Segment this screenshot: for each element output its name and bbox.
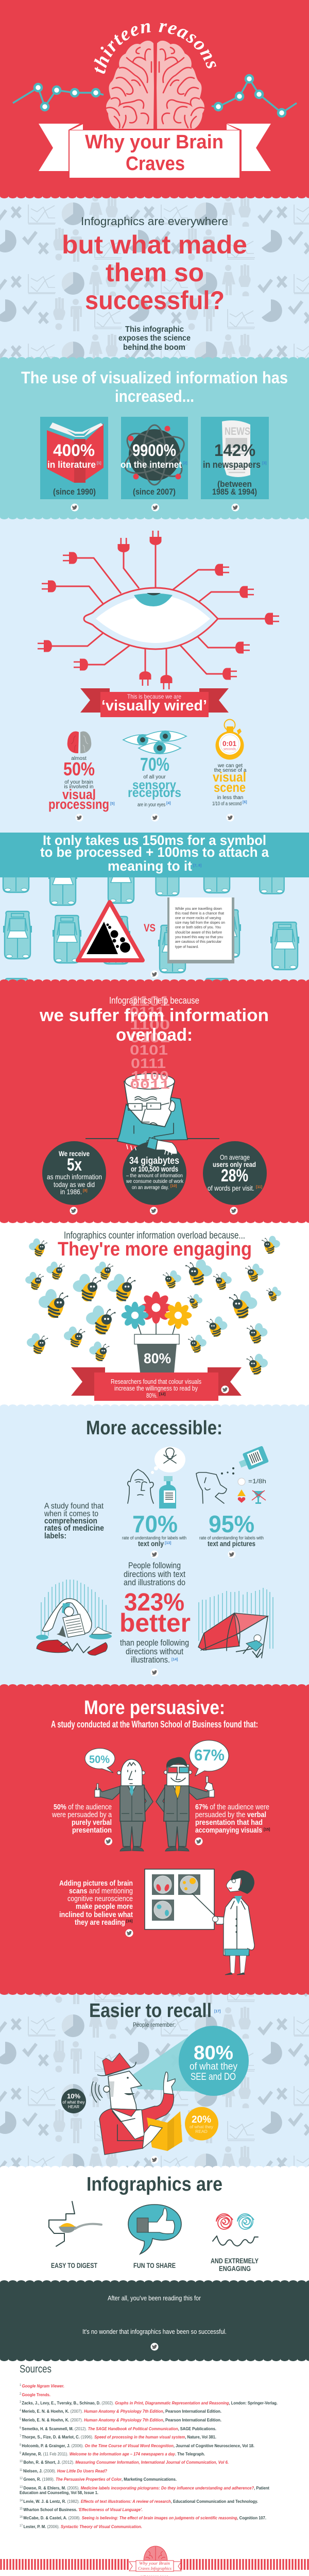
sources list: Google Ngram Viewer. [22, 2383, 64, 2388]
stat bubble: 10%: 10% [67, 2092, 80, 2100]
heading: more accessible: More accessible: [86, 1417, 222, 1439]
stat: 95% text and pictures [199, 1511, 264, 1558]
binary digits stream: 0101 [130, 1042, 168, 1058]
icon: extremely engaging: ENGAGING [219, 2264, 251, 2273]
stat bubble: 20% [185, 2107, 218, 2140]
sources list: McCabe, D. & Castel, A. [23, 2515, 68, 2520]
text: brain scans persuade: scans and mentioning [69, 1887, 133, 1895]
stat: 50% visual processing: 50% [63, 758, 95, 779]
stat circle: 5x: as much information [47, 1173, 102, 1181]
stat: 70% text only [122, 1511, 186, 1558]
stat: visual scene: scene [214, 779, 246, 795]
icon: stopwatch: 0:01 [222, 739, 236, 748]
text: medicine label study: comprehension [44, 1517, 97, 1526]
icon: book [47, 422, 104, 483]
stat circle: 28%: of words per visit. [208, 1184, 254, 1192]
stat: 70% text only: 70% [132, 1511, 178, 1537]
sources list: Alleyne, R. [22, 2451, 43, 2456]
speech bubble: 67%: 67% [194, 1746, 225, 1764]
sources list: (2005). Medicine labels incorporating pictograms: Do they influence understanding and adherence?, Patient [67, 2485, 275, 2490]
sources list: 10 [20, 2460, 23, 2463]
sources list: Dowse, R. & Ehlers, M. [23, 2485, 67, 2490]
red overload section background [0, 981, 309, 1221]
panel: literature: 400% [53, 441, 95, 460]
stat: visual scene: the sense of a [214, 768, 247, 773]
intro text: them so [106, 258, 204, 287]
heading: easier to recall: [17] [214, 2010, 220, 2013]
icon: fun to share: FUN TO SHARE [133, 2261, 176, 2269]
heading: easier to recall: Easier to recall [89, 2000, 212, 2022]
banner: 150ms [0, 833, 309, 877]
icon: easy to digest: EASY TO DIGEST [51, 2261, 97, 2269]
sources list: 2 [20, 2393, 22, 2396]
text: brain scans persuade: make people more [76, 1902, 133, 1911]
stat: visual scene [212, 719, 247, 807]
illustration: flower pot 80%: 80% [144, 1350, 171, 1366]
sources list: Thorpe, S., Fize, D. & Marlot, C. [22, 2434, 81, 2439]
stat: 323% better: than people following [120, 1638, 189, 1648]
intro text: but what made [62, 230, 247, 259]
text: 67% with visuals: [15] [264, 1828, 270, 1832]
text sign card: this road there is a chance that [175, 911, 225, 916]
heading: information overload: we suffer from information [39, 1006, 269, 1025]
stat: 70% text only: text only [138, 1539, 164, 1548]
panel: newspapers: (between [217, 479, 252, 489]
stat circle: 5x [42, 1141, 106, 1205]
banner: 150ms: It only takes us 150ms for a symbol [43, 833, 266, 848]
man's hand over circle [127, 1138, 177, 1155]
stat circle: 34 gigabytes: we consume outside of work [126, 1179, 184, 1184]
panel: newspapers: [3] [262, 462, 267, 465]
illustration: verbal presenter [85, 1748, 153, 1851]
illustration: wired eye with plugs [38, 531, 279, 689]
text sign card: one or both sides of you. You [175, 925, 221, 929]
intro text: behind the boom [123, 343, 185, 352]
sources list: Lester, P. M. [23, 2524, 47, 2529]
icon: fun to share [128, 2205, 181, 2269]
stat circle: 28%: On average [220, 1153, 250, 1161]
stat: 50% visual processing: of your brain [64, 779, 93, 785]
sources list: (1989). The Persuasive Properties of Color, Marketing Communications. [42, 2477, 183, 2482]
stat bubble: 80%: of what they [190, 2061, 237, 2072]
heading: more engaging: They're more engaging [58, 1239, 252, 1260]
text: brain scans persuade: Adding pictures of brain [59, 1879, 133, 1888]
bees swarm [25, 1236, 281, 1376]
closing panel text: It's no wonder that infographics have been so successful. [82, 2328, 227, 2335]
sources list: (11 Feb 2011). Welcome to the information age – 174 newspapers a day. The Telegraph. [43, 2451, 209, 2456]
icon: newspaper [222, 420, 250, 477]
intro text: successful? [85, 286, 225, 315]
share icons row 1 [71, 504, 239, 511]
sources list: 12 [20, 2477, 23, 2480]
stat circle: 28%: users only read [213, 1160, 256, 1168]
ribbon: colour visuals: [12] [159, 1393, 165, 1396]
stat: 70% text only: rate of understanding for labels with [122, 1535, 186, 1541]
sources list: Bohn, R. & Short, J. [23, 2460, 62, 2465]
text: 50% verbal presentation: purely verbal [72, 1818, 112, 1827]
panel: newspapers: 1985 & 1994) [212, 487, 257, 497]
stat: 323% better: 323% [124, 1589, 184, 1616]
stat: 50% visual processing: [5] [110, 802, 115, 806]
stat circle: 34 gigabytes: – the amount of information [126, 1173, 183, 1179]
text sign card: one or more rocks of varying [175, 916, 221, 920]
icon: stopwatch [215, 719, 244, 759]
stat circle: 34 gigabytes: [10] [170, 1184, 177, 1188]
stat circle: 28% [203, 1141, 267, 1205]
background cars [2, 845, 299, 1027]
ribbon: visually wired [80, 688, 229, 717]
stat circle: 28%: [11] [256, 1185, 262, 1189]
stat: 323% better: better [119, 1608, 191, 1637]
stat: 70% sensory receptors: receptors [128, 786, 181, 800]
text: 67% with visuals [195, 1803, 270, 1845]
icon: globe [120, 425, 189, 485]
text sign card: should be aware of this before [175, 930, 222, 935]
panel: newspapers: 142% [214, 441, 255, 460]
illustration: overloaded man: 1100 [131, 1070, 169, 1085]
sources list: 13 [20, 2486, 23, 2489]
icon: brain [106, 41, 204, 129]
stat: visual scene: 1/10 of a second [212, 801, 242, 807]
sources list: 15 [20, 2507, 23, 2511]
stat circle: 5x: We receive [59, 1149, 90, 1158]
text sign card: While you are travelling down [175, 906, 222, 911]
text sign card: type of hazard. [175, 944, 199, 949]
icon: extremely engaging [211, 2214, 259, 2273]
sources heading: Sources [20, 2363, 52, 2375]
banner: 150ms: [7, 8] [193, 864, 201, 868]
text: brain scans persuade: inclined to believe what [59, 1910, 133, 1919]
stat bubble: 80% [179, 2026, 249, 2096]
sources list: Merieb, E. N. & Hoehn, K. [22, 2409, 71, 2414]
label: VS: VS [144, 922, 156, 934]
text: medicine label study: rates of medicine [44, 1524, 104, 1533]
share icons row 2 [75, 814, 234, 821]
ribbon: colour visuals: Researchers found that colour visuals [111, 1378, 201, 1385]
text: 50% verbal presentation [52, 1803, 112, 1845]
sources list: Wharton School of Business. [23, 2507, 78, 2512]
stat: 50% visual processing [48, 732, 115, 812]
sources list: Education and Counseling, Vol 58, Issue 1. [20, 2490, 98, 2495]
binary digits stream: 0101 [130, 1030, 170, 1045]
intro text: This infographic [125, 325, 184, 334]
heading: use of visualized information: increased... [115, 387, 194, 405]
icon: stopwatch: seconds [224, 748, 236, 751]
text sign card: size may fall from the slopes on [175, 920, 225, 925]
text: 50% verbal presentation: were persuaded by a [52, 1810, 112, 1819]
stat: 50% visual processing: visual [62, 787, 96, 802]
text: brain scans persuade [59, 1879, 133, 1937]
heading: more persuasive: More persuasive: [84, 1697, 225, 1719]
stat: 323% better: directions with text [124, 1569, 185, 1579]
footer logo: small brain and ribbon: Craves Infographics [138, 2566, 171, 2571]
ribbon: colour visuals: 80%. [146, 1392, 158, 1399]
sources list: Green, R. [23, 2477, 42, 2482]
heading: information overload: overload: [116, 1025, 193, 1045]
stat circle: 34 gigabytes: on an average day. [132, 1185, 169, 1191]
panel: literature [40, 417, 108, 499]
ribbon: visually wired: This is because we are [127, 693, 181, 700]
title ribbon [39, 124, 271, 178]
stat circle: 34 gigabytes [123, 1141, 186, 1205]
line chart right [212, 75, 297, 116]
icon: half brain [67, 732, 91, 753]
illustration: confused man with medicine [128, 1447, 185, 1509]
text sign card: are cautious of this particular [175, 939, 221, 944]
stat bubble: 80%: 80% [194, 2042, 233, 2064]
sources list: 11 [20, 2469, 23, 2472]
sources list: 9 [20, 2452, 22, 2455]
sources list: (2007). Human Anatomy & Physiology 7th Edition, Pearson International Edition. [71, 2409, 228, 2414]
heading: Why your Brain Craves: Craves [126, 153, 185, 175]
text: medicine label study: when it comes to [44, 1510, 98, 1518]
speech bubble: 67% [190, 1740, 229, 1776]
stat bubble: 20%: READ [195, 2129, 208, 2134]
illustration: informed man with pictogram medicine [196, 1446, 269, 1504]
illustration: visual presenter [156, 1740, 229, 1851]
heading: information overload [39, 995, 269, 1045]
heading: use of visualized information: The use of visualized information has [21, 368, 288, 387]
stat: 323% better [119, 1561, 191, 1676]
stat: 50% visual processing: is involved in [64, 784, 94, 790]
ribbon: colour visuals: increase the willingness to read by [114, 1384, 198, 1392]
icon: falling rocks sign [78, 902, 143, 960]
footer stripes [1, 2559, 308, 2570]
panel: internet: (since 2007) [133, 487, 176, 497]
speech bubble: 50%: 50% [89, 1754, 110, 1766]
sources list: 3 [20, 2401, 22, 2404]
footer logo: small brain and ribbon [129, 2546, 181, 2571]
stat: 323% better: illustrations. [131, 1655, 170, 1665]
stat: visual scene: in less than [217, 795, 243, 801]
intro text: exposes the science [118, 334, 191, 343]
text: brain scans persuade: they are reading [75, 1918, 125, 1927]
panel: internet: on the internet [121, 460, 182, 470]
title arc: thirteen reasons: thirteen reasons [94, 23, 216, 74]
text: 67% with visuals: presentation that had [195, 1818, 263, 1827]
sources list: 14 [20, 2499, 23, 2502]
stat: visual scene: visual [213, 769, 246, 785]
text: 67% with visuals: accompanying visuals [195, 1826, 262, 1835]
sources list: Levie, W. J. & Lentz, R. [23, 2499, 67, 2504]
line chart left [13, 84, 104, 110]
intro text [62, 215, 247, 352]
heading: more engaging: Infographics counter information overload because... [64, 1230, 245, 1241]
banner: 150ms: meaning to it [108, 858, 192, 874]
sources list: 4 [20, 2409, 22, 2412]
sources list: Merieb, E. N. & Hoehn, K. [22, 2417, 71, 2422]
footer logo: small brain and ribbon: Why your Brain [139, 2561, 170, 2566]
sources list: 'Effectiveness of Visual Language'. [78, 2507, 143, 2512]
stat circle: 34 gigabytes: or 100,500 words [131, 1165, 178, 1174]
share icons row 3 [70, 1207, 238, 1215]
illustration: overloaded man [85, 1070, 219, 1150]
stat: 50% visual processing: processing [48, 796, 109, 812]
heading: use of visualized information [21, 368, 288, 405]
sources list: (2008). How Little Do Users Read? [44, 2468, 114, 2473]
stat bubble: 20%: 20% [192, 2114, 211, 2125]
heading: information overload: Infographics help because [109, 995, 199, 1006]
stat bubble: 20%: of what they [190, 2124, 214, 2129]
sources list: (2002). Graphs in Print, Diagrammatic Representation and Reasoning, London: Springer-Verlag. [101, 2400, 284, 2405]
sources list: (2008). Seeing is believing: The effect of brain images on judgments of scientific reasoning, Cognition 107. [68, 2515, 270, 2520]
stat bubble: 10%: of what they [62, 2100, 85, 2105]
text: medicine label study: A study found that [44, 1502, 104, 1511]
panel: literature: [1] [97, 462, 101, 465]
heading: infographics are: Infographics are [87, 2174, 222, 2195]
sources list: Nielsen, J. [23, 2468, 44, 2473]
sources list: (1982). Effects of text illustrations: A review of research, Educational Communication and Technology. [67, 2499, 269, 2504]
sources list: (2007). Human Anatomy & Physiology 7th Edition, Pearson International Edition. [71, 2417, 228, 2422]
stat: 70% sensory receptors: 70% [140, 754, 169, 775]
closing panel text: After all, you've been reading this for [108, 2294, 201, 2302]
sources list: 16 [20, 2516, 23, 2519]
stat: 323% better: directions without [126, 1647, 183, 1656]
heading: Why your Brain Craves [85, 131, 224, 175]
text: 50% verbal presentation: presentation [72, 1826, 112, 1835]
text sign card: you travel this way so that you [175, 935, 223, 939]
panel: literature: in literature [47, 460, 96, 470]
stat: 70% sensory receptors: [4] [166, 802, 171, 805]
text: brain scans persuade: [16] [126, 1920, 132, 1923]
stat bubble: 10% [61, 2089, 86, 2113]
stat: 70% sensory receptors [123, 731, 186, 808]
illustration: scientist with pointer [192, 1870, 254, 1975]
stat circle: 5x: in 1986. [60, 1188, 82, 1196]
text sign card [167, 897, 234, 963]
banner: 150ms: to be processed + 100ms to attach a [40, 844, 269, 860]
stat bubble: 10%: HEAR [68, 2105, 79, 2109]
illustration: relaxed man with pitched tent [198, 1588, 273, 1658]
sources list: (2006). On the Time Course of Visual Word Recognition, Journal of Cognitive Neuroscience, Vol 18. [72, 2443, 265, 2448]
stat: 95% text and pictures: 95% [209, 1511, 254, 1537]
icon: three eyes [123, 731, 186, 754]
sources list: Semetko, H. & Scammell, M. [22, 2426, 75, 2431]
closing panel text [82, 2294, 227, 2350]
binary digits stream: 1101 [130, 993, 170, 1009]
sources list: (2006). Syntactic Theory of Visual Communication. [47, 2524, 152, 2529]
panel: newspapers: in newspapers [203, 460, 261, 470]
text: 67% with visuals: 67% of the audience were [195, 1803, 269, 1811]
text: medicine label study: labels: [44, 1532, 66, 1540]
stat: 95% text and pictures: text and pictures [208, 1539, 255, 1548]
sources list: Holcomb, P. & Grainger, J. [22, 2443, 72, 2448]
illustration: man in rain with text directions [36, 1580, 112, 1655]
stat: 70% sensory receptors: sensory [132, 778, 176, 792]
sources list [20, 2383, 278, 2529]
share icon: recall [150, 2156, 159, 2164]
stat circle: 34 gigabytes: 34 gigabytes [129, 1156, 179, 1166]
illustration: recall man [92, 2035, 198, 2155]
stat: 70% sensory receptors: of all your [143, 774, 166, 780]
binary digits stream [130, 993, 170, 1071]
stat circle: 5x: 5x [67, 1155, 82, 1175]
sources list: (2012). The SAGE Handbook of Political Communication, SAGE Publications. [75, 2426, 222, 2431]
ribbon: colour visuals [71, 1367, 242, 1401]
sources list: 17 [20, 2524, 23, 2528]
stat: 50% visual processing: almost [71, 756, 87, 761]
illustration: informed man with pictogram medicine: =1/8h [248, 1478, 266, 1485]
share icon: sign [150, 971, 159, 978]
illustration: flower pot 80% [122, 1292, 192, 1372]
stat: 95% text and pictures: rate of understanding for labels with [199, 1535, 264, 1541]
sources list: 8 [20, 2444, 22, 2447]
illustration: overloaded man: 0011 [130, 1079, 170, 1093]
intro text: Infographics are everywhere [81, 215, 228, 228]
panel: internet: 9900% [132, 441, 176, 460]
stat: 323% better: People following [128, 1561, 181, 1570]
ribbon: visually wired: ‘visually wired’ [101, 698, 207, 714]
sources list: (2012). Measuring Consumer Information, International Journal of Communication, Vol 6. [62, 2460, 247, 2465]
text: brain scans persuade: cognitive neuroscience [67, 1894, 133, 1903]
stat circle: 5x: [9] [83, 1189, 88, 1193]
sources list: 7 [20, 2435, 22, 2438]
sources list: Zacks, J., Levy, E., Tversky, B., Schinao, D. [22, 2400, 101, 2405]
heading: easier to recall: People remember: [133, 2021, 176, 2028]
binary digits stream: 0111 [130, 1004, 165, 1020]
icon: easy to digest [49, 2201, 101, 2269]
text: medicine label study [44, 1502, 104, 1540]
stat: 70% sensory receptors: are in your eyes [138, 802, 165, 808]
stat: visual scene: [6] [243, 801, 247, 804]
panel: newspapers [201, 417, 269, 499]
heading: Why your Brain Craves: Why your Brain [85, 131, 224, 153]
board with brain scans [145, 1869, 214, 1929]
speech bubble: 50% [85, 1748, 115, 1773]
sources list: 5 [20, 2418, 22, 2421]
binary digits stream: 0111 [131, 1056, 166, 1071]
icon: newspaper: NEWS [225, 426, 250, 437]
panel: internet: [2] [183, 462, 187, 465]
heading: more persuasive [51, 1697, 258, 1730]
panel: internet [120, 417, 189, 499]
sources list: 6 [20, 2427, 22, 2430]
stat bubble: 80%: SEE and DO [191, 2072, 236, 2082]
stat: 323% better: [14] [171, 1658, 178, 1662]
panel: literature: (since 1990) [53, 487, 96, 497]
stat: visual scene: we can get [217, 763, 243, 769]
text: 67% with visuals: persuaded by the verbal [195, 1810, 266, 1819]
stat circle: 28%: 28% [221, 1166, 248, 1185]
sources list: Google Trends. [22, 2392, 50, 2397]
text: 50% verbal presentation: 50% of the audience [54, 1803, 112, 1811]
stat: 70% text only: [13] [165, 1541, 171, 1545]
icon: extremely engaging: AND EXTREMELY [211, 2257, 259, 2265]
sources list: (1996). Speed of processing in the human visual system, Nature, Vol 381. [81, 2434, 220, 2439]
stat: 323% better: and illustrations do [124, 1578, 185, 1587]
binary digits stream: 1100 [130, 1017, 170, 1032]
stat circle: 5x: today as we did [54, 1180, 95, 1189]
sources list: 1 [20, 2384, 22, 2387]
heading: more engaging [58, 1230, 252, 1260]
